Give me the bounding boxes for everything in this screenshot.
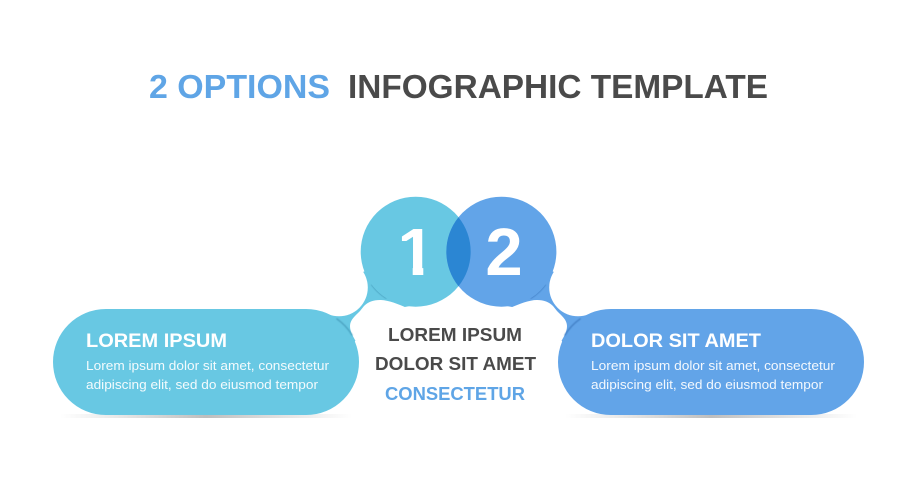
title: 2 OPTIONS — [149, 68, 330, 105]
right text: adipiscing elit, sed do eiusmod tempor — [591, 377, 824, 392]
left text: Lorem ipsum dolor sit amet, consectetur — [86, 358, 330, 373]
left text: LOREM IPSUM — [86, 331, 227, 352]
right pill — [558, 309, 864, 415]
pill shadows — [60, 414, 857, 418]
circle 2 — [446, 197, 556, 307]
center text: DOLOR SIT AMET — [375, 354, 536, 374]
right text — [591, 331, 836, 392]
circle overlap — [446, 217, 471, 286]
right text: DOLOR SIT AMET — [591, 331, 761, 352]
left text — [86, 331, 330, 392]
connector creases — [337, 285, 580, 335]
circle 1 — [361, 197, 471, 307]
center white blob — [350, 300, 567, 416]
left text: adipiscing elit, sed do eiusmod tempor — [86, 377, 319, 392]
title: INFOGRAPHIC TEMPLATE — [348, 68, 768, 105]
center text: LOREM IPSUM — [388, 325, 522, 345]
title — [149, 68, 768, 105]
center text: CONSECTETUR — [385, 384, 525, 404]
left connector — [310, 259, 410, 345]
left pill — [53, 309, 359, 415]
right text: Lorem ipsum dolor sit amet, consectetur — [591, 358, 836, 373]
number 1: 1 — [397, 215, 435, 290]
right connector — [507, 259, 607, 345]
center text — [375, 325, 536, 404]
number 2: 2 — [485, 215, 523, 290]
